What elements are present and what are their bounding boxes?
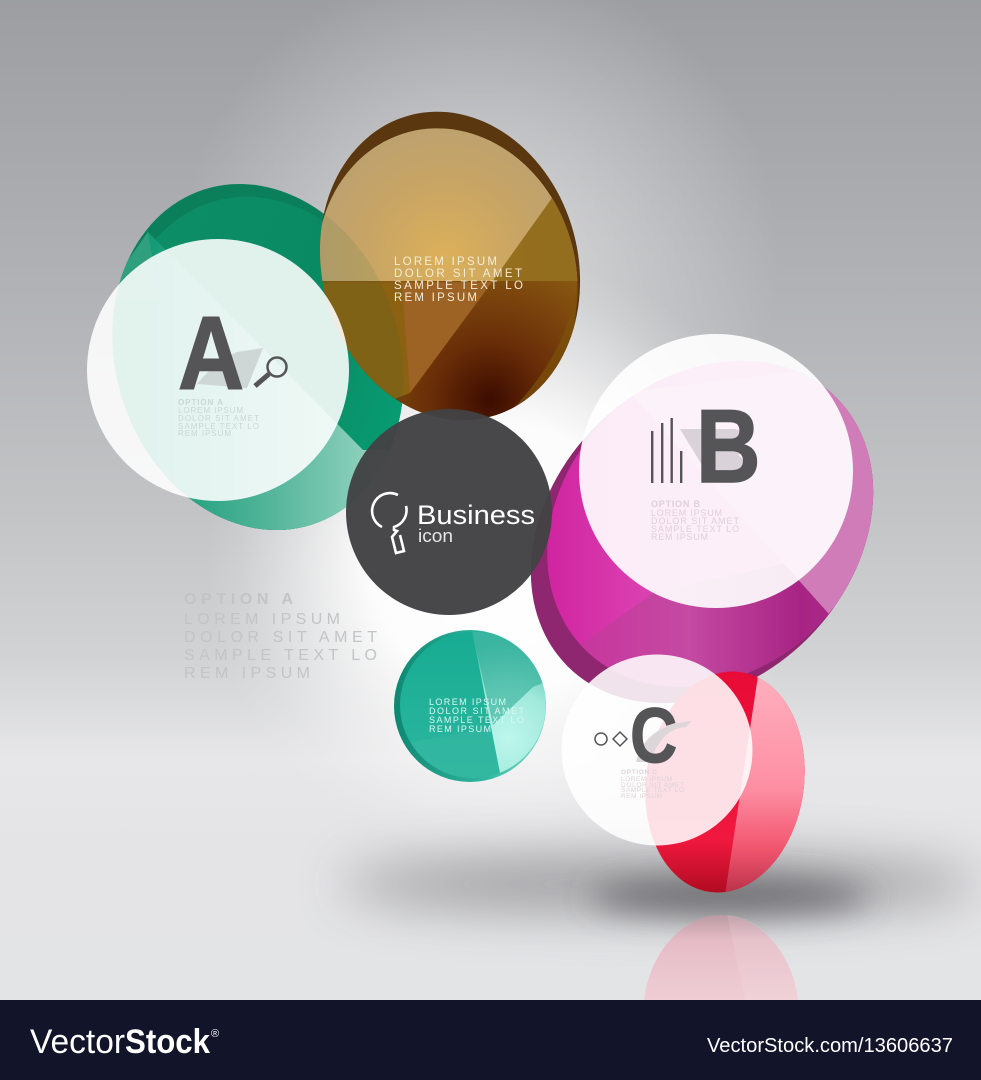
- footer bar: Stock: [125, 1023, 210, 1061]
- ghost letter shape: [636, 721, 692, 762]
- icon: magnifier: [255, 358, 286, 386]
- teal circle text: SAMPLE TEXT LO: [429, 715, 524, 725]
- disc: [87, 239, 349, 501]
- ghost letter shape: [197, 348, 263, 388]
- teal circle text: LOREM IPSUM: [429, 697, 506, 707]
- option A small text: LOREM IPSUM: [178, 406, 243, 415]
- option A side text: LOREM IPSUM: [184, 611, 340, 628]
- teal circle text: [429, 697, 524, 734]
- white disc B: [579, 334, 853, 608]
- option B small text: REM IPSUM: [651, 532, 708, 542]
- icon: circle and diamond: [595, 732, 627, 746]
- teal circle text: REM IPSUM: [429, 724, 491, 734]
- option C small text: DOLOR SIT AMET: [621, 782, 684, 789]
- floor shadow: [340, 858, 980, 915]
- panel: teal circle: [394, 630, 546, 782]
- brown sphere: [320, 112, 580, 417]
- panel: green circle A: [112, 184, 402, 530]
- option A side text: REM IPSUM: [184, 665, 310, 682]
- panel: dark business circle: [346, 409, 552, 615]
- panel: red circle C: [562, 654, 820, 900]
- magenta sphere: [530, 361, 874, 703]
- option B small text: [651, 499, 740, 542]
- option A side text: OPTION A: [184, 591, 293, 608]
- option B small text: DOLOR SIT AMET: [651, 516, 740, 526]
- option A small text: REM IPSUM: [178, 429, 231, 438]
- brown circle text: [394, 256, 523, 304]
- option C small text: OPTION C: [621, 769, 657, 776]
- reflection of red circle: [644, 915, 798, 1000]
- dark disc: [346, 409, 552, 615]
- option B small text: LOREM IPSUM: [651, 508, 722, 518]
- brown circle text: SAMPLE TEXT LO: [394, 280, 523, 292]
- teal circle text: DOLOR SIT AMET: [429, 706, 524, 716]
- ghost letter shape: [680, 429, 746, 470]
- option C small text: SAMPLE TEXT LO: [621, 787, 684, 794]
- panel: magenta circle B: [530, 334, 874, 703]
- icon: bars: [651, 418, 682, 483]
- white disc A with content: [87, 239, 349, 501]
- option A small text: SAMPLE TEXT LO: [178, 422, 259, 431]
- teal sphere: [394, 630, 546, 782]
- letter C: C: [630, 693, 677, 779]
- white disc C: [562, 654, 752, 846]
- red sphere: [645, 672, 805, 892]
- option C small text: [621, 769, 684, 800]
- footer url: VectorStock.com/13606637: [707, 1035, 953, 1057]
- brown circle text: REM IPSUM: [394, 292, 477, 304]
- option A side text: SAMPLE TEXT LO: [184, 647, 377, 664]
- footer bar: [0, 1000, 981, 1080]
- brown circle text: DOLOR SIT AMET: [394, 268, 522, 280]
- green sphere: [112, 184, 402, 530]
- brown circle text: LOREM IPSUM: [394, 256, 497, 268]
- option B small text: SAMPLE TEXT LO: [651, 524, 739, 534]
- option B small text: OPTION B: [651, 499, 700, 509]
- option A side text: DOLOR SIT AMET: [184, 629, 377, 646]
- letter B: B: [696, 388, 761, 505]
- icon: key outline: [372, 493, 407, 553]
- option A small text: DOLOR SIT AMET: [178, 414, 259, 423]
- option A side text: [184, 591, 377, 682]
- footer bar: ®: [211, 1028, 219, 1040]
- icon label: icon: [418, 526, 453, 546]
- business heading: Business: [417, 500, 535, 530]
- option A small text: [178, 398, 259, 438]
- option C small text: REM IPSUM: [621, 793, 662, 800]
- footer logo: Vector: [30, 1023, 125, 1061]
- option A small text: OPTION A: [178, 398, 223, 407]
- panel: brown circle: [320, 112, 580, 417]
- letter A: A: [178, 295, 244, 411]
- option C small text: LOREM IPSUM: [621, 776, 672, 783]
